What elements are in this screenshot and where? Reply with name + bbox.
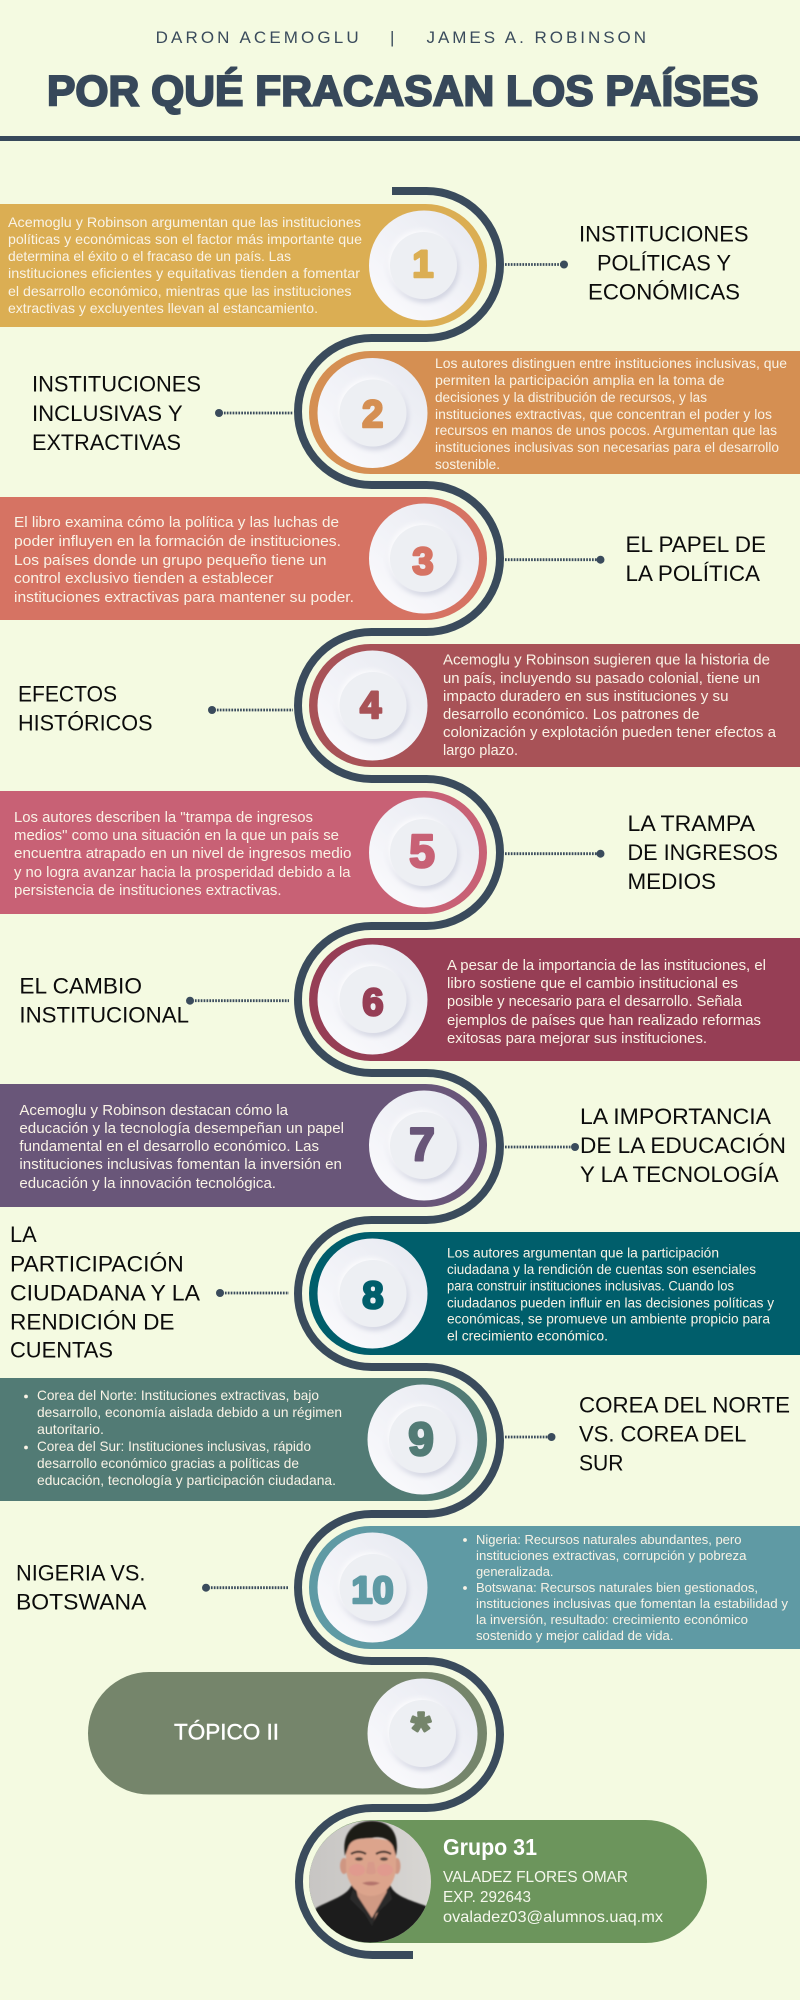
panel: card 7 <box>0 1084 487 1207</box>
number plate 10: 10 <box>351 1570 394 1612</box>
panel: card 4 <box>309 644 800 767</box>
heading 8: LA <box>10 1222 37 1247</box>
heading 10: BOTSWANA <box>16 1590 147 1615</box>
author text: EXP. 292643 <box>443 1889 531 1906</box>
card text: posible y necesario para el desarrollo. Señala <box>447 993 743 1010</box>
heading 3: LA POLÍTICA <box>626 561 760 586</box>
heading 4: HISTÓRICOS <box>18 711 152 736</box>
card text: determina el éxito o el fracaso de un país. Las <box>8 248 291 264</box>
card bullet list <box>24 1388 342 1488</box>
card text: A pesar de la importancia de las instituciones, el <box>447 957 766 974</box>
heading 9: VS. COREA DEL <box>579 1422 746 1447</box>
number plate 10 <box>318 1532 428 1642</box>
panel: card 3 <box>0 497 487 620</box>
card text: Acemoglu y Robinson destacan cómo la <box>19 1102 289 1119</box>
card text: Los autores describen la "trampa de ingresos <box>14 809 313 826</box>
card text <box>447 1245 774 1343</box>
card text: exitosas para mejorar sus instituciones. <box>447 1030 707 1047</box>
authors line: DARON ACEMOGLU <box>156 28 359 47</box>
panel: card 2 <box>309 351 800 474</box>
card text: instituciones extractivas para mantener su poder. <box>14 589 354 606</box>
heading 7: DE LA EDUCACIÓN <box>580 1133 786 1158</box>
heading 10: NIGERIA VS. <box>16 1561 145 1586</box>
card text: recursos en manos de unos pocos. Argumentan que las <box>435 423 777 438</box>
number plate 9 <box>368 1384 478 1494</box>
heading 2: EXTRACTIVAS <box>32 430 181 455</box>
number plate 8: 8 <box>362 1275 384 1317</box>
card text: ciudadana y la rendición de cuentas son esenciales <box>447 1262 756 1277</box>
number plate 6: 6 <box>362 982 384 1024</box>
heading 8: CUENTAS <box>10 1338 113 1363</box>
card background <box>309 1820 707 1943</box>
card text <box>19 1102 344 1192</box>
panel: card 9 <box>0 1378 487 1501</box>
card text: instituciones inclusivas fomentan la inversión en <box>19 1156 342 1173</box>
panel: author card <box>305 1820 707 1945</box>
connector 4 <box>208 706 293 714</box>
panel: card 6 <box>309 938 800 1061</box>
heading 4: EFECTOS <box>18 682 117 707</box>
heading 3 <box>626 532 766 586</box>
panel: card 5 <box>0 791 487 914</box>
number plate 9: 9 <box>408 1413 434 1465</box>
number plate 1: 1 <box>412 244 434 286</box>
heading 9 <box>579 1393 790 1476</box>
card text: poder influyen en la formación de instituciones. <box>14 533 341 550</box>
heading 5: LA TRAMPA <box>628 811 755 836</box>
author photo <box>309 1820 431 1942</box>
authors line: JAMES A. ROBINSON <box>426 28 646 47</box>
card text: encuentra atrapado en un nivel de ingresos medio <box>14 845 352 862</box>
card text: el desarrollo económico, mientras que las instituciones <box>8 283 352 299</box>
card text: un país, incluyendo su pasado colonial, tiene un <box>443 670 760 687</box>
card background <box>0 1378 487 1501</box>
card text: decisiones y la distribución de recursos, y las <box>435 390 707 405</box>
heading 5 <box>628 811 778 894</box>
connector 6 <box>186 997 289 1005</box>
author text <box>443 1834 663 1926</box>
heading 8 <box>10 1222 200 1363</box>
card text: Acemoglu y Robinson argumentan que las instituciones <box>8 214 361 230</box>
card text: Los autores argumentan que la participación <box>447 1245 719 1260</box>
connector 9 <box>505 1433 556 1441</box>
card text: económicas, se promueve un ambiente propicio para <box>447 1312 770 1327</box>
number plate 6 <box>318 944 428 1054</box>
card text: instituciones eficientes y equitativas tienden a fomentar <box>8 265 360 281</box>
card text <box>14 809 352 899</box>
card text: largo plazo. <box>443 742 518 759</box>
header divider <box>0 136 800 141</box>
card text: colonización y explotación pueden tener efectos a <box>443 724 777 741</box>
card text: ejemplos de países que han realizado reformas <box>447 1012 761 1029</box>
card bullet list: instituciones inclusivas que fomentan la estabilidad y <box>476 1596 788 1611</box>
connector 1 <box>505 260 568 268</box>
card text: ciudadanos pueden influir en las decisiones políticas y <box>447 1295 774 1310</box>
heading 6: INSTITUCIONAL <box>19 1002 189 1027</box>
card bullet list: desarrollo, economía aislada debido a un régimen <box>37 1405 342 1420</box>
heading 7: Y LA TECNOLOGÍA <box>580 1162 779 1187</box>
card bullet list: Corea del Sur: Instituciones inclusivas, rápido <box>37 1439 311 1454</box>
connector 10 <box>202 1584 289 1592</box>
card bullet list: Corea del Norte: Instituciones extractivas, bajo <box>37 1388 319 1403</box>
number plate 2 <box>318 358 428 468</box>
heading 2: INCLUSIVAS Y <box>32 401 183 426</box>
card bullet list: la inversión, resultado: crecimiento económico <box>476 1612 748 1627</box>
authors line <box>156 28 646 47</box>
heading 8: PARTICIPACIÓN <box>10 1251 184 1276</box>
heading 3: EL PAPEL DE <box>626 532 766 557</box>
heading 5: MEDIOS <box>628 869 716 894</box>
pill background <box>88 1672 487 1794</box>
heading 7: LA IMPORTANCIA <box>580 1104 771 1129</box>
card text: educación y la tecnología desempeñan un papel <box>19 1120 344 1137</box>
heading 1: INSTITUCIONES <box>579 222 748 247</box>
heading 5: DE INGRESOS <box>628 840 778 865</box>
heading 2 <box>32 372 201 455</box>
card text <box>447 957 766 1047</box>
card bullet list: Nigeria: Recursos naturales abundantes, pero <box>476 1532 742 1547</box>
author text: Grupo 31 <box>443 1834 537 1860</box>
number plate 7: 7 <box>409 1118 435 1170</box>
card text: impacto duradero en sus instituciones y su <box>443 688 728 705</box>
title: POR QUÉ FRACASAN LOS PAÍSES <box>47 68 758 116</box>
card text: y no logra avanzar hacia la prosperidad debido a la <box>14 864 351 881</box>
topic label: TÓPICO II <box>174 1719 279 1744</box>
card bullet list: educación, tecnología y participación ciudadana. <box>37 1473 336 1488</box>
heading 1: ECONÓMICAS <box>588 280 740 305</box>
heading 1 <box>579 222 748 305</box>
heading 8: CIUDADANA Y LA <box>10 1280 200 1305</box>
card text <box>14 514 354 606</box>
heading 4 <box>18 682 152 736</box>
heading 9: COREA DEL NORTE <box>579 1393 790 1418</box>
number plate 4: 4 <box>360 685 381 727</box>
card text: educación y la innovación tecnológica. <box>19 1175 276 1192</box>
card text: medios" como una situación en la que un país se <box>14 827 339 844</box>
number plate 5 <box>369 798 479 908</box>
card text: desarrollo económico. Los patrones de <box>443 706 700 723</box>
panel: card 8 <box>309 1232 800 1355</box>
card text: control exclusivo tienden a establecer <box>14 570 274 587</box>
number plate 7 <box>369 1090 479 1200</box>
card background <box>0 791 487 914</box>
card background <box>309 1232 800 1355</box>
card text: instituciones inclusivas son necesarias para el desarrollo <box>435 440 779 455</box>
card text: Los autores distinguen entre instituciones inclusivas, que <box>435 356 787 371</box>
card bullet list: autoritario. <box>37 1422 104 1437</box>
card text: para construir instituciones inclusivas. Cuando los <box>447 1278 734 1293</box>
card text: El libro examina cómo la política y las luchas de <box>14 514 339 531</box>
number plate 2: 2 <box>362 394 383 436</box>
card text: Acemoglu y Robinson sugieren que la historia de <box>443 652 770 668</box>
card text: permiten la participación amplia en la toma de <box>435 373 724 388</box>
card background <box>0 204 487 327</box>
card background <box>309 938 800 1061</box>
card background <box>309 644 800 767</box>
card text: Los países donde un grupo pequeño tiene un <box>14 552 326 569</box>
card text: fundamental en el desarrollo económico. Las <box>19 1138 319 1155</box>
card background <box>0 497 487 620</box>
number plate 8 <box>318 1238 428 1348</box>
card background <box>0 1084 487 1207</box>
heading 6: EL CAMBIO <box>19 973 142 998</box>
heading 1: POLÍTICAS Y <box>597 251 731 276</box>
number plate 5: 5 <box>409 825 435 877</box>
asterisk plate: * <box>411 1702 431 1758</box>
card bullet list: generalizada. <box>476 1564 554 1579</box>
heading 2: INSTITUCIONES <box>32 372 201 397</box>
authors line: | <box>390 28 394 47</box>
card bullet list: instituciones extractivas, corrupción y pobreza <box>476 1548 747 1563</box>
number plate 4 <box>318 650 428 760</box>
panel: card 10 <box>309 1526 800 1649</box>
serpentine timeline line <box>298 191 500 1955</box>
card bullet list: Botswana: Recursos naturales bien gestionados, <box>476 1580 758 1595</box>
card text: el crecimiento económico. <box>447 1328 608 1343</box>
card bullet list <box>463 1532 788 1643</box>
card text: instituciones extractivas, que concentran el poder y los <box>435 407 772 422</box>
card text <box>8 214 362 316</box>
card text: políticas y económicas son el factor más importante que <box>8 231 362 247</box>
card bullet list: sostenido y mejor calidad de vida. <box>476 1628 674 1643</box>
card bullet list: desarrollo económico gracias a políticas de <box>37 1456 299 1471</box>
number plate 3: 3 <box>412 541 434 583</box>
heading 10 <box>16 1561 147 1615</box>
card text: extractivas y excluyentes llevan al estancamiento. <box>8 300 318 316</box>
card text: sostenible. <box>435 457 500 472</box>
connector 8 <box>216 1289 289 1297</box>
card background <box>309 1526 800 1649</box>
number plate 3 <box>369 504 479 614</box>
heading 7 <box>580 1104 786 1187</box>
heading 8: RENDICIÓN DE <box>10 1309 174 1334</box>
heading 9: SUR <box>579 1451 624 1476</box>
author text: VALADEZ FLORES OMAR <box>443 1869 628 1886</box>
connector 2 <box>215 409 293 417</box>
card background <box>309 351 800 474</box>
card text <box>443 652 777 759</box>
card text: libro sostiene que el cambio institucional es <box>447 975 738 992</box>
panel: topic pill <box>88 1672 487 1794</box>
asterisk plate <box>368 1678 478 1788</box>
connector 3 <box>505 556 604 564</box>
panel: card 1 <box>0 204 487 327</box>
number plate 1 <box>369 210 479 320</box>
connector 7 <box>505 1143 579 1151</box>
card text <box>435 356 787 472</box>
author text: ovaladez03@alumnos.uaq.mx <box>443 1909 663 1926</box>
heading 6 <box>19 973 189 1027</box>
card text: persistencia de instituciones extractivas. <box>14 882 282 899</box>
connector 5 <box>505 850 604 858</box>
